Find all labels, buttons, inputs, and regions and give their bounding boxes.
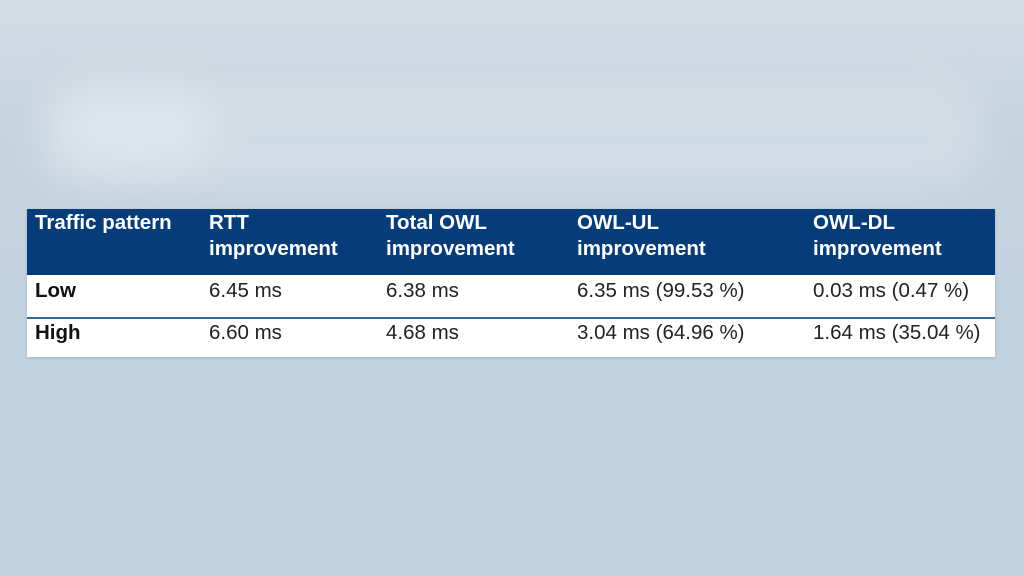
row: high — [35, 321, 980, 344]
row: high: 4.68 ms — [386, 321, 459, 344]
row: low: 6.38 ms — [386, 279, 459, 302]
row: high: High — [35, 321, 81, 344]
table — [27, 209, 995, 357]
header row: OWL-DL — [813, 211, 895, 234]
row: high: 3.04 ms (64.96 %) — [577, 321, 744, 344]
header row: improvement — [813, 237, 942, 260]
header row: improvement — [577, 237, 706, 260]
header row: RTT — [209, 211, 249, 234]
header row: improvement — [386, 237, 515, 260]
header row: Total OWL — [386, 211, 487, 234]
header row — [27, 209, 995, 275]
header row: OWL-UL — [577, 211, 659, 234]
row: low: Low — [35, 279, 76, 302]
row: low: 6.45 ms — [209, 279, 282, 302]
header row: improvement — [209, 237, 338, 260]
row: low — [35, 279, 969, 302]
header row: Traffic pattern — [35, 211, 172, 234]
row: high: 6.60 ms — [209, 321, 282, 344]
row: low: 0.03 ms (0.47 %) — [813, 279, 969, 302]
row: high: 1.64 ms (35.04 %) — [813, 321, 980, 344]
row: low: 6.35 ms (99.53 %) — [577, 279, 744, 302]
